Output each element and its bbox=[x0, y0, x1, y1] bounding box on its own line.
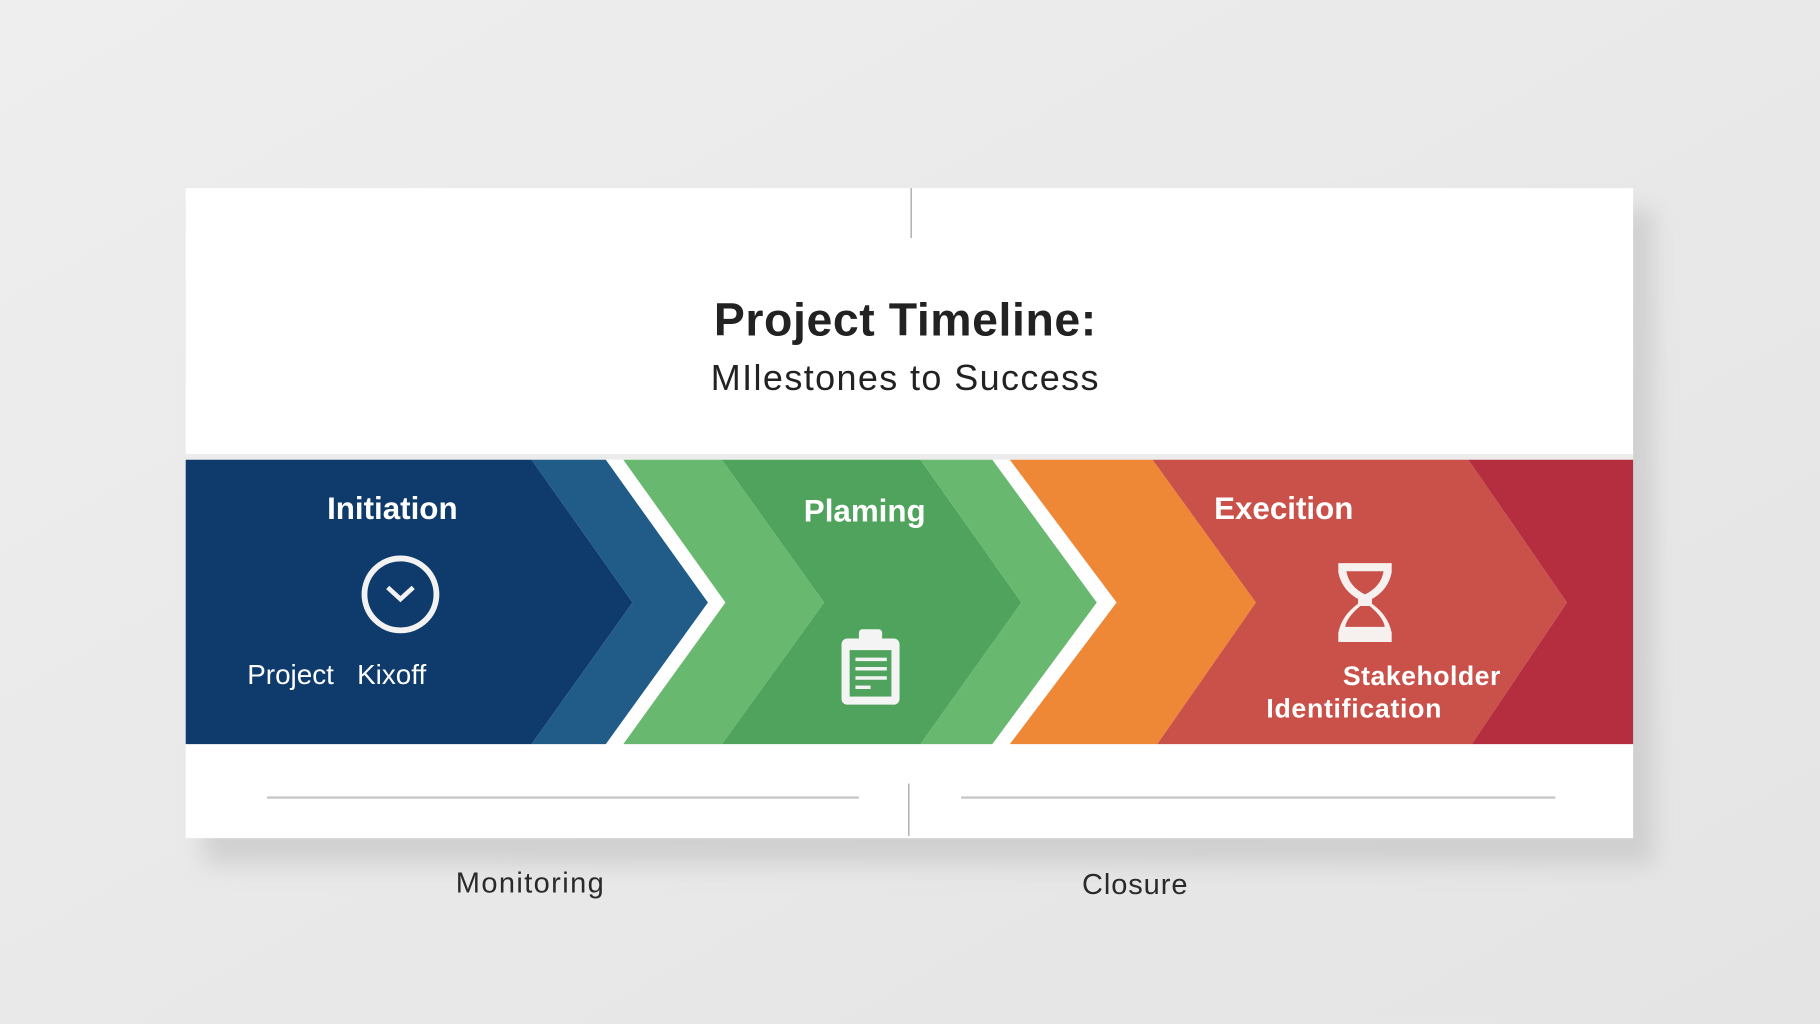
stage: Initiation: Initiation bbox=[327, 491, 458, 526]
stage: Initiation bbox=[247, 491, 458, 690]
title: Project Timeline: bbox=[714, 294, 1097, 346]
stage: Execution bbox=[1214, 491, 1501, 723]
card bbox=[186, 188, 1633, 838]
stage: Execution: Execition bbox=[1214, 491, 1353, 526]
stage: Execution: Identification bbox=[1266, 693, 1442, 723]
stage: Execution: Stakeholder bbox=[1343, 661, 1501, 691]
label: Monitoring: Monitoring bbox=[456, 868, 605, 900]
label: Closure: Closure bbox=[1082, 869, 1188, 901]
stage: Initiation: Project Kixoff bbox=[247, 659, 426, 690]
card shadow bbox=[203, 209, 1654, 865]
icon: hourglass bbox=[1338, 563, 1392, 642]
stage: Planning: Plaming bbox=[804, 493, 926, 528]
stage: Planning bbox=[804, 493, 926, 705]
title: MIlestones to Success bbox=[711, 357, 1100, 398]
icon: clock bbox=[364, 558, 436, 630]
title bbox=[711, 294, 1100, 398]
chevron band bbox=[186, 454, 1633, 744]
icon: clipboard bbox=[842, 629, 900, 705]
